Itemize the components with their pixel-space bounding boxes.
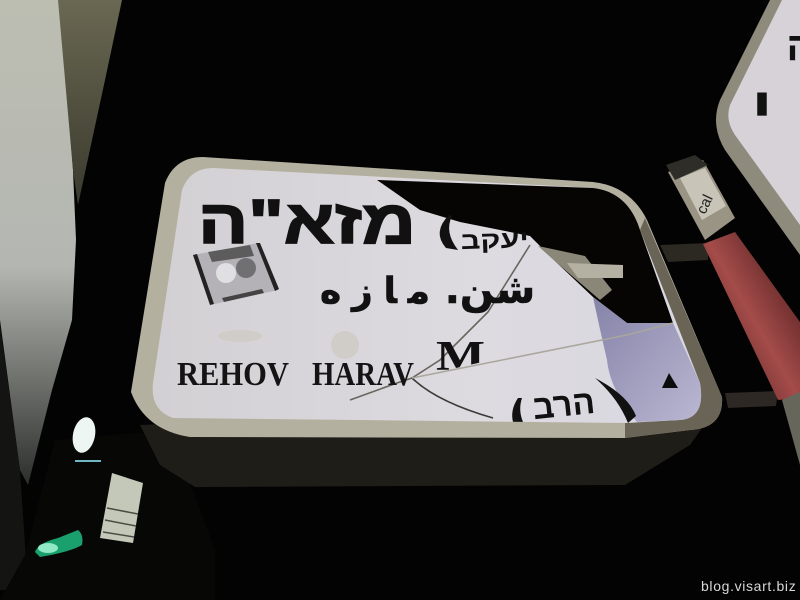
traffic light and lit window: [0, 415, 215, 600]
cracks: [350, 245, 673, 418]
second sign at right: [716, 0, 800, 255]
building wall at left: [0, 0, 122, 590]
bracket arms: [660, 243, 778, 408]
Hebrew fragment: יעקב: [460, 226, 529, 255]
Arabic line: [320, 267, 535, 313]
Hebrew heading: מזא"ה: [198, 188, 416, 257]
broken hole: [377, 180, 673, 323]
sign metal frame: [131, 157, 722, 438]
pole: cal: [693, 192, 717, 217]
Latin street name: HARAV: [312, 356, 414, 393]
sticker: [193, 243, 279, 305]
partial letter M: M: [436, 334, 485, 380]
partial letter M: [436, 342, 484, 370]
shaded shard: [593, 297, 701, 422]
Arabic line: شن.: [445, 267, 535, 313]
watermark: blog.visart.biz: [701, 578, 796, 594]
pole: [666, 155, 800, 465]
sign face: [153, 168, 701, 427]
Arabic line: مازه: [320, 271, 430, 312]
Hebrew fragment bottom: הרב: [531, 383, 597, 427]
sign box underside: [140, 400, 722, 487]
stains: [218, 330, 359, 359]
Latin street name: REHOV: [177, 356, 289, 393]
Hebrew fragment bottom: [512, 378, 636, 427]
Latin street name: [177, 356, 414, 393]
inner tube: [538, 246, 623, 300]
opening bracket: [440, 215, 458, 250]
second sign at right: י: [751, 72, 773, 152]
